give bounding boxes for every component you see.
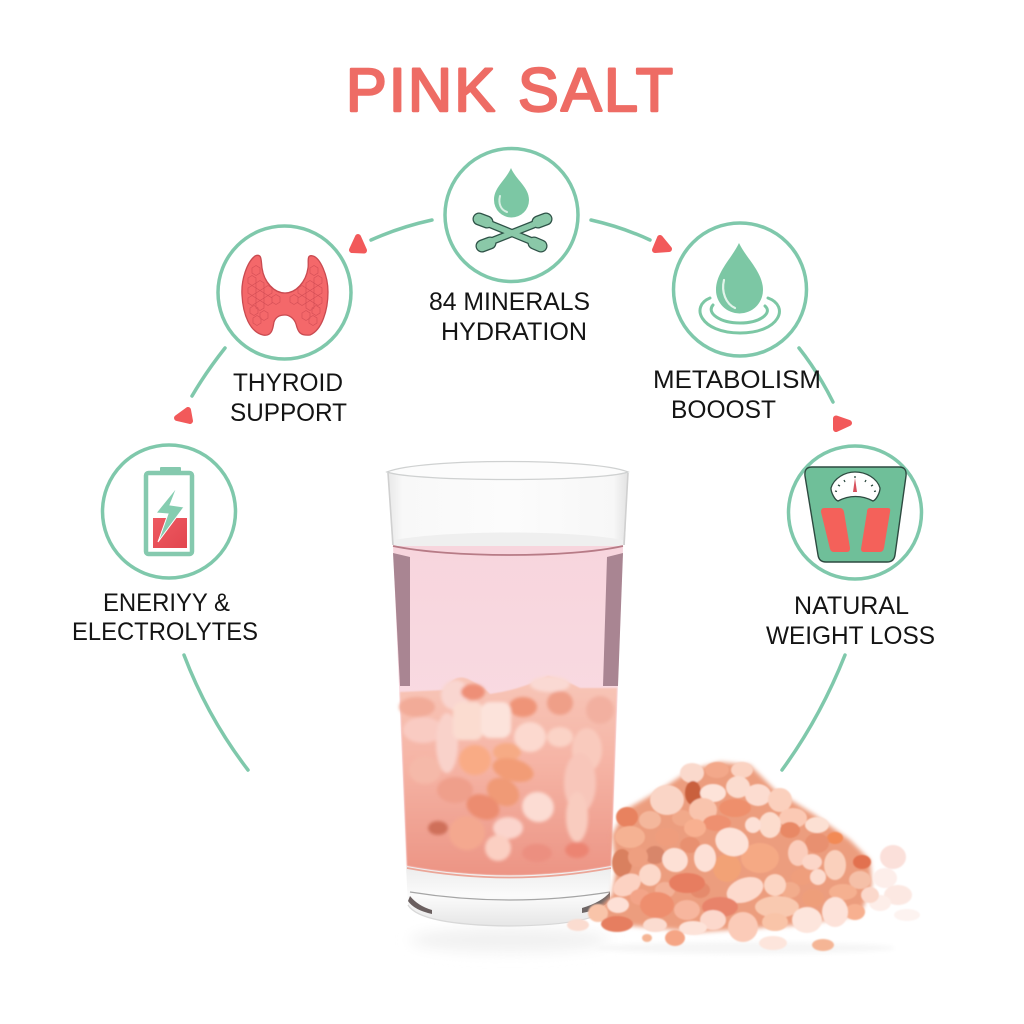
water body <box>393 546 623 872</box>
icon circle <box>445 148 578 282</box>
arrow: thyroid to energy <box>177 348 225 421</box>
pile of pink salt crystals <box>567 762 920 954</box>
arc: lower right <box>782 655 845 770</box>
pile shadow <box>595 942 895 954</box>
water surface <box>394 532 623 556</box>
label: HYDRATION <box>441 318 587 346</box>
reflection <box>410 928 610 952</box>
title: SALT <box>518 56 673 124</box>
glass upper wall <box>388 472 628 545</box>
label: SUPPORT <box>230 399 347 427</box>
label: BOOOST <box>671 396 776 424</box>
title <box>346 56 673 124</box>
glass of pink salt water <box>387 462 628 952</box>
label: 84 MINERALS <box>429 288 590 316</box>
icon circle <box>218 226 351 359</box>
connector arrows: cycle arc <box>177 220 849 770</box>
glass base <box>406 866 611 926</box>
label <box>653 366 821 424</box>
icon: weighing scale <box>805 467 906 562</box>
panel: energy and electrolytes <box>72 445 258 646</box>
icon: drop with crossed swabs <box>479 168 546 246</box>
icon circle <box>674 223 806 356</box>
icon: battery <box>146 467 192 554</box>
label: WEIGHT LOSS <box>766 622 935 650</box>
panel: 84 minerals hydration <box>429 148 590 346</box>
icon: thyroid <box>242 255 328 335</box>
panel: natural weight loss <box>766 446 935 650</box>
crystals <box>567 762 920 951</box>
label <box>766 592 935 650</box>
label <box>72 589 258 646</box>
dark side refractions <box>393 553 410 686</box>
label: METABOLISM <box>653 366 821 394</box>
panel: thyroid support <box>218 226 351 427</box>
label: ELECTROLYTES <box>72 618 258 646</box>
panel: metabolism boost <box>653 223 821 424</box>
label <box>230 369 347 427</box>
pile mass <box>592 762 872 932</box>
label: NATURAL <box>794 592 909 620</box>
label: ENERIYY & <box>103 589 230 617</box>
salt in the glass <box>399 676 617 876</box>
arrow: minerals to metabolism <box>591 220 669 250</box>
label <box>429 288 590 346</box>
arc: lower left <box>184 655 248 770</box>
label: THYROID <box>233 369 343 397</box>
title: PINK <box>346 56 495 124</box>
icon circle <box>102 445 236 578</box>
arrow: minerals to thyroid <box>352 220 432 250</box>
icon: drop with ripples <box>700 243 779 333</box>
arrow: metabolism to weight loss <box>799 348 849 429</box>
rim <box>387 462 628 480</box>
icon circle <box>788 446 922 579</box>
